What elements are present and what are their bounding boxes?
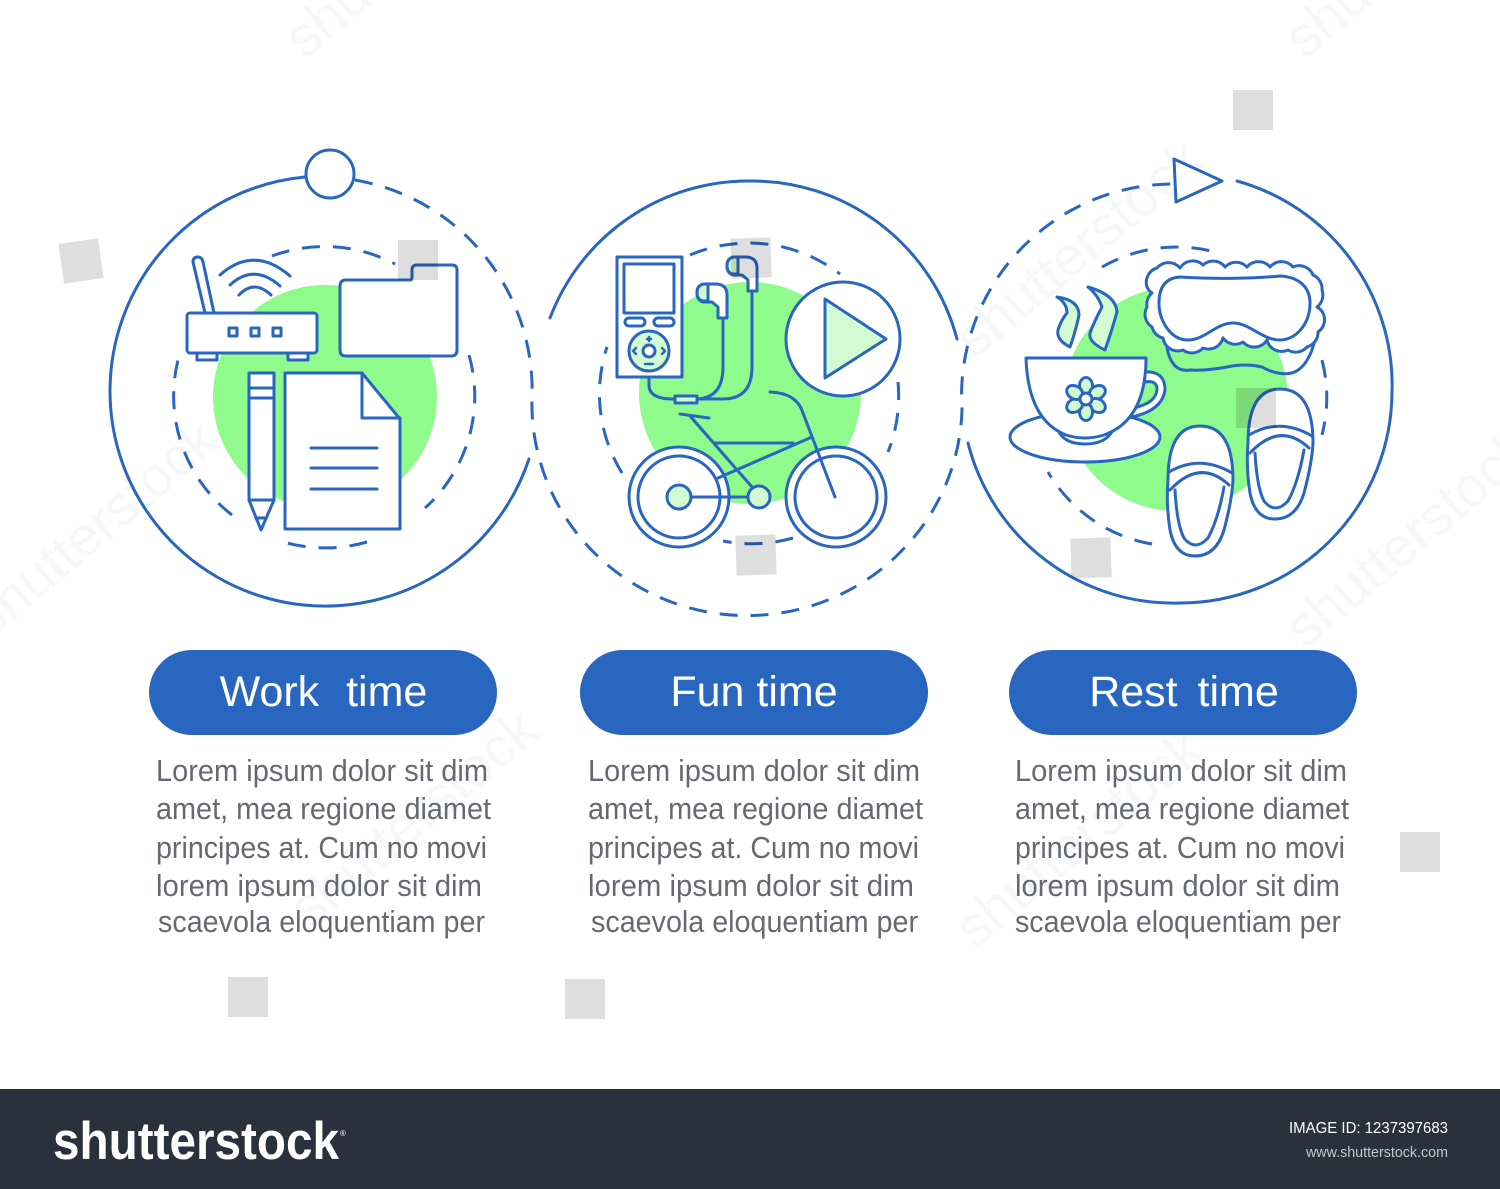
icon: document: [285, 373, 400, 529]
pill: fun time: [580, 650, 928, 735]
inner dashed ring: [599, 243, 899, 544]
icon: earphones: [649, 257, 757, 403]
text block: rest time: Lorem ipsum dolor sit dim: [1015, 754, 1347, 788]
text block: fun time: [588, 754, 923, 939]
image id: IMAGE ID: 1237397683: [1289, 1120, 1448, 1137]
text block: rest time: principes at. Cum no movi: [1015, 831, 1345, 865]
icon: pencil: [249, 373, 274, 530]
icon: play button: [786, 282, 900, 396]
icon: media player: [617, 257, 682, 377]
text block: fun time: lorem ipsum dolor sit dim: [588, 869, 914, 903]
text block: work time: lorem ipsum dolor sit dim: [156, 869, 482, 903]
icon: tea cup and saucer: [1010, 287, 1165, 462]
footer logo: ®: [340, 1129, 346, 1138]
watermark tiles: [58, 90, 1440, 1019]
footer bar: [0, 1089, 1500, 1189]
text block: rest time: amet, mea regione diamet: [1015, 792, 1349, 826]
icon: router: [187, 257, 317, 360]
inner dashed ring: [174, 247, 475, 548]
watermark text: shutterstock: [277, 696, 550, 939]
pill: work time: [149, 650, 497, 735]
website: www.shutterstock.com: [1305, 1145, 1448, 1161]
panel: fun time: [550, 181, 957, 547]
text block: rest time: scaevola eloquentiam per: [1015, 905, 1341, 939]
watermark text: shutterstock: [942, 716, 1215, 959]
text block: rest time: [1015, 754, 1349, 939]
outer ring: [110, 177, 529, 606]
text block: work time: amet, mea regione diamet: [156, 792, 491, 826]
green background circle: [1064, 287, 1288, 511]
green background circle: [213, 285, 437, 509]
text block: work time: principes at. Cum no movi: [156, 831, 487, 865]
icon: bicycle: [629, 392, 886, 547]
icon: sleep mask: [1145, 261, 1325, 374]
text block: work time: scaevola eloquentiam per: [158, 905, 485, 939]
outer arc: [550, 181, 957, 339]
text block: work time: Lorem ipsum dolor sit dim: [156, 754, 488, 788]
step arrow: [1174, 159, 1222, 202]
outer arc: [968, 181, 1392, 603]
connecting dashed path: [355, 180, 1172, 616]
watermark text: shutterstock: [942, 126, 1215, 369]
pill: work time: Work time: [220, 668, 427, 716]
panel: rest time: [968, 159, 1392, 603]
pill: rest time: [1009, 650, 1357, 735]
text block: fun time: principes at. Cum no movi: [588, 831, 919, 865]
footer logo: shutterstock: [53, 1112, 339, 1171]
text block: fun time: scaevola eloquentiam per: [591, 905, 918, 939]
step marker: [306, 150, 354, 198]
green background circle: [639, 282, 861, 504]
text block: fun time: amet, mea regione diamet: [588, 792, 923, 826]
text block: rest time: lorem ipsum dolor sit dim: [1015, 869, 1340, 903]
icon: slippers: [1167, 389, 1313, 556]
inner dashed ring: [1048, 247, 1327, 544]
text block: work time: [156, 754, 491, 939]
pill: fun time: Fun time: [670, 668, 838, 716]
text block: fun time: Lorem ipsum dolor sit dim: [588, 754, 920, 788]
pill: rest time: Rest time: [1089, 668, 1279, 716]
icon: folder: [340, 265, 457, 356]
panel: work time: [110, 150, 529, 606]
